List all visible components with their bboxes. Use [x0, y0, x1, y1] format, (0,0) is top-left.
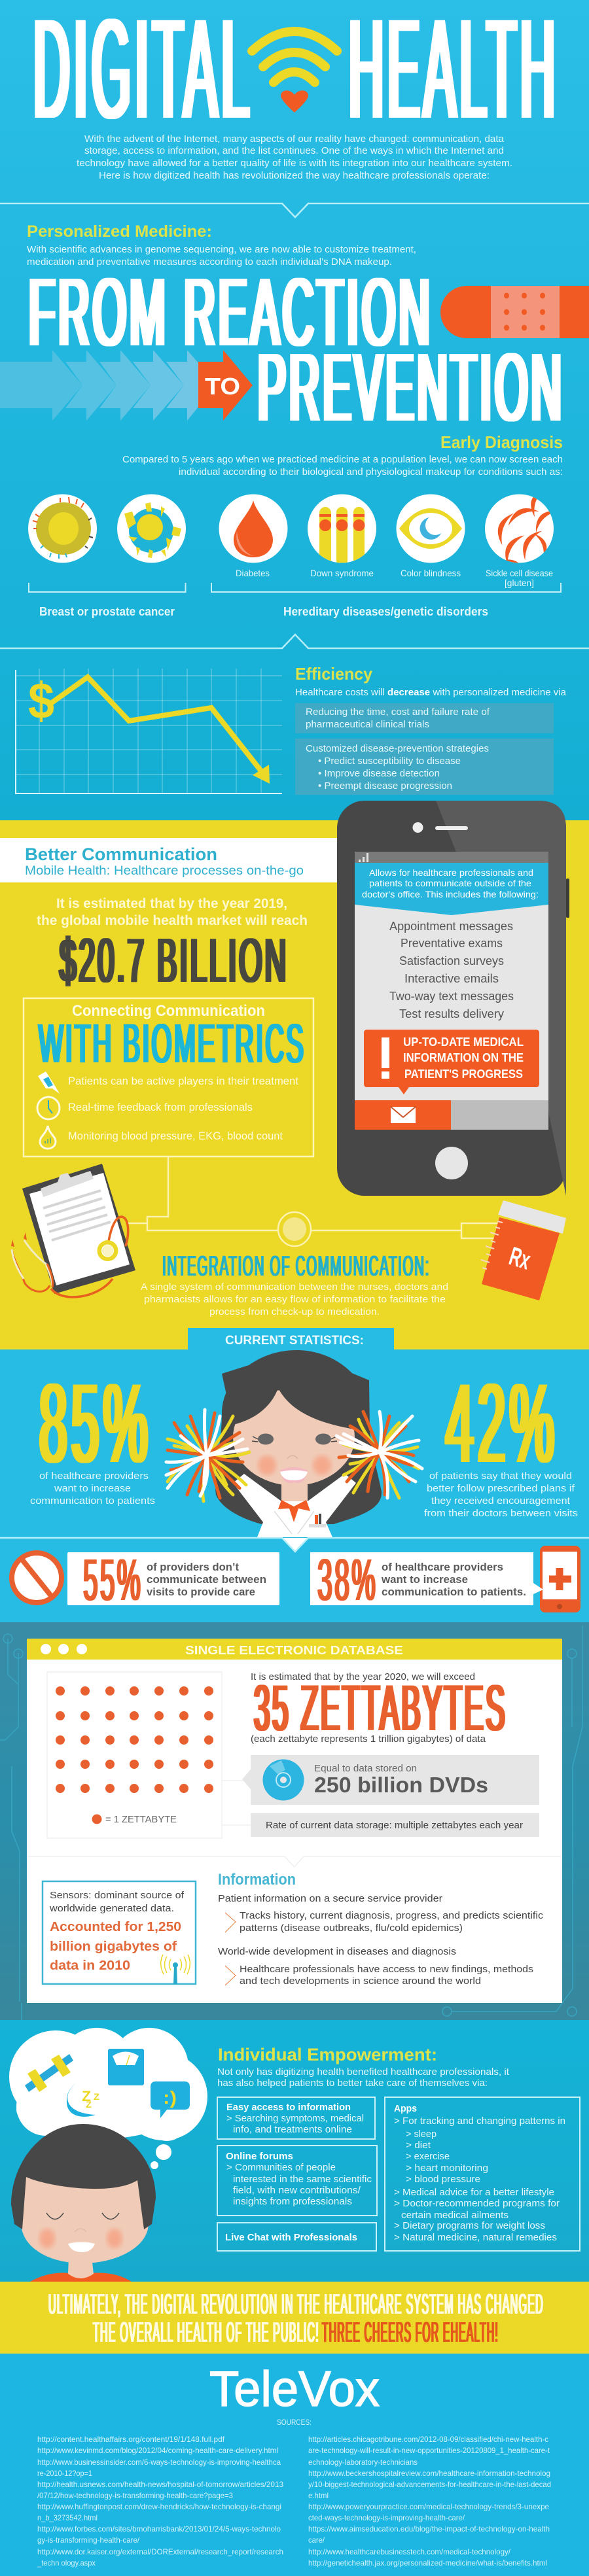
dot matrix: 35 zettabytes: = 1 ZETTABYTE: [105, 1814, 177, 1825]
phone list: Satisfaction surveys: [399, 954, 504, 967]
phone mockup: [337, 801, 569, 1196]
panel: connecting communication with biometrics: Patients can be active players in their treatment: [68, 1075, 298, 1087]
intro paragraph: Here is how digitized health has revolutionized the way healthcare professionals operate:: [99, 170, 490, 181]
heading: sources: SOURCES:: [277, 2418, 312, 2427]
bracket: hereditary: [211, 583, 561, 592]
panel: Better Communication banner: [0, 838, 347, 882]
text: mobile market estimate: [37, 896, 308, 928]
list: sources left: http://health.usnews.com/health-news/hospital-of-tomorrow/articles/2013: [37, 2480, 283, 2489]
panel: 38% stat: want to increase: [381, 1573, 468, 1586]
window buttons: [41, 1644, 87, 1654]
list: sources left: /07/12/how-technology-is-transforming-health-care?page=3: [37, 2491, 233, 2500]
illustration: thought cloud: [9, 2028, 207, 2169]
panel: sensors: [43, 1881, 196, 1984]
panel: rate of data storage: Rate of current data storage: multiple zettabytes each year: [266, 1820, 523, 1831]
logo: TeleVox: TeleVox: [209, 2361, 380, 2417]
heading: Personalized Medicine: Personalized Medicine:: [27, 222, 212, 241]
panel: clinical trials: [295, 703, 554, 733]
phone alert: UP-TO-DATE MEDICAL: [403, 1036, 524, 1049]
text: zettabytes estimate: It is estimated that by the year 2020, we will exceed: [251, 1671, 475, 1682]
text: integration paragraph: pharmacists allows for an easy flow of information to facilitate the: [144, 1294, 446, 1305]
list: sources left: gy-is-transforming-health-care/: [37, 2535, 140, 2545]
panel: clinical trials: Reducing the time, cost and failure rate of: [306, 706, 490, 718]
labels: hereditary conditions: Color blindness: [401, 568, 461, 578]
stat: 85%: communication to patients: [30, 1495, 155, 1506]
panel: prevention strategies: Customized disease-prevention strategies: [306, 743, 489, 754]
icon: dumbbell: [25, 2054, 73, 2092]
list: sources right: are-technology-will-result-in-new-opportunities-20120809_1_health-care-t: [308, 2446, 550, 2455]
label: Breast or prostate cancer: Breast or prostate cancer: [39, 605, 175, 618]
icon: wifi heart: [252, 31, 337, 113]
icon: smiley speech bubble: [151, 2081, 190, 2118]
text: WITH BIOMETRICS: [39, 1013, 306, 1074]
list: sources right: care/: [308, 2535, 325, 2545]
phone alert: [364, 1030, 539, 1094]
text: $20.7 BILLION: [60, 926, 289, 996]
panel: prevention strategies: • Preempt disease progression: [318, 780, 452, 792]
panel: apps: > exercise: [406, 2151, 450, 2162]
panel: apps: > Medical advice for a better lifestyle: [394, 2187, 554, 2198]
panel: online forums: field, with new contributions/: [233, 2185, 361, 2196]
arrow: TO: [198, 350, 253, 421]
panel: apps: > heart monitoring: [406, 2163, 488, 2174]
panel: live chat: Live Chat with Professionals: [225, 2232, 357, 2243]
panel: DVD equivalent: [242, 1755, 539, 1805]
list: sources right: e.html: [308, 2491, 329, 2500]
list: sources left: [37, 2435, 283, 2567]
intro paragraph: storage, access to information, and the list continues. One of the ways in which the Internet and: [84, 145, 504, 156]
background: blue empowerment section: [0, 2020, 589, 2282]
phone alert: INFORMATION ON THE: [403, 1051, 524, 1064]
text: healthcare costs: Healthcare costs will decrease with personalized medicine via: [295, 687, 567, 698]
panel: easy access to information: Easy access to information: [226, 2102, 351, 2113]
panel: sensors: Sensors: dominant source of: [50, 1890, 185, 1901]
panel: 55% stat: [67, 1548, 279, 1613]
panel: 38% stat: [310, 1548, 543, 1613]
list: sources right: http://genetichealth.jax.org/personalized-medicine/what-is/benefits.html: [308, 2558, 547, 2567]
text: early diagnosis paragraph: [122, 454, 563, 478]
text: zettabytes estimate: (each zettabyte represents 1 trillion gigabytes) of data: [251, 1733, 486, 1745]
list: sources left: n_b_3273542.html: [37, 2513, 98, 2522]
icon: breast or prostate cancer cell 2: [117, 495, 186, 563]
panel: DVD equivalent: 250 billion DVDs: [314, 1773, 488, 1797]
list: sources right: [308, 2435, 551, 2567]
text: integration paragraph: [141, 1281, 448, 1317]
phone list: Appointment messages: [389, 920, 513, 933]
panel: connecting communication with biometrics: Monitoring blood pressure, EKG, blood count: [68, 1130, 283, 1142]
list: sources right: http://www.poweryourpractice.com/medical-technology-trends/3-unexpe: [308, 2502, 549, 2511]
panel: Better Communication banner: Better Communication: [25, 844, 217, 864]
labels: hereditary conditions: [gluten]: [505, 578, 534, 588]
text: information: Patient information on a secure service provider: [218, 1893, 442, 1904]
phone list: Preventative exams: [401, 937, 503, 950]
text: personalized medicine paragraph: medication and preventative measures according to each individual’s DNA makeup.: [27, 256, 392, 268]
list: sources right: cted-ways-technology-is-improving-health-care/: [308, 2513, 465, 2522]
text: personalized medicine paragraph: With scientific advances in genome sequencing, we are now able to customize treatment,: [27, 244, 416, 255]
list: sources right: http://articles.chicagotribune.com/2012-08-09/classified/chi-new-health-c: [308, 2435, 548, 2444]
phone message panel: doctor's office. This includes the following:: [362, 889, 539, 899]
panel: sensors: data in 2010: [50, 1958, 130, 1973]
panel: apps: > Natural medicine, natural remedies: [394, 2232, 557, 2243]
panel: online forums: insights from professionals: [233, 2196, 352, 2207]
icon: clock: [37, 1097, 60, 1119]
icon: sickle cell disease: [485, 495, 554, 563]
panel: 38% stat: communication to patients.: [382, 1586, 526, 1598]
panel: Better Communication banner: Mobile Health: Healthcare processes on-the-go: [25, 864, 304, 878]
background: top blue section: [0, 0, 589, 820]
icon: bandage: [440, 286, 589, 338]
intro paragraph: technology have allowed for a better quality of life is with its integration into our healthcare system.: [77, 158, 512, 169]
panel: apps: > Doctor-recommended programs for: [394, 2198, 560, 2209]
panel: clinical trials: pharmaceutical clinical trials: [306, 719, 429, 730]
text: information: patterns (disease outbreaks, flu/cold epidemics): [240, 1923, 463, 1934]
text: empowerment paragraph: has also helped patients to better take care of themselves via:: [217, 2078, 488, 2089]
phone message panel: patients to communicate outside of the: [369, 878, 531, 888]
text: integration paragraph: process from check-up to medication.: [209, 1306, 380, 1317]
stat: 85%: of healthcare providers: [39, 1471, 149, 1482]
panel: apps: > blood pressure: [406, 2174, 480, 2185]
list: sources left: http://www.huffingtonpost.com/drew-hendricks/how-technology-is-changi: [37, 2502, 281, 2511]
panel: apps: certain medical ailments: [401, 2210, 509, 2221]
list: sources right: https://www.aimseducation.edu/blog/the-impact-of-technology-on-health: [308, 2524, 550, 2533]
text: information: and tech developments in science around the world: [240, 1976, 481, 1987]
panel: 55% stat: visits to provide care: [147, 1586, 255, 1598]
background: dark teal database section: [0, 1622, 589, 2020]
text: 85%: [39, 1361, 152, 1486]
panel: rate of data storage: [251, 1813, 539, 1837]
arrows: chevron trail: [0, 350, 198, 421]
illustration: smiling patient: [11, 2124, 156, 2282]
pom-pom left: [166, 1410, 249, 1501]
panel: apps: [385, 2097, 580, 2251]
icon: smiley speech bubble: :): [163, 2087, 177, 2108]
icon: scale: [108, 2049, 144, 2085]
panel: connecting communication with biometrics: Real-time feedback from professionals: [68, 1101, 253, 1113]
labels: hereditary conditions: [236, 568, 553, 588]
stat: 42%: [424, 1361, 578, 1519]
icon: diabetes blood drop: [219, 495, 288, 563]
icon: medical phone: [540, 1546, 580, 1612]
arrow: TO: TO: [205, 373, 240, 400]
panel: sensors: billion gigabytes of: [50, 1940, 177, 1954]
icon: Rx bottle: [481, 1200, 566, 1300]
background: footer blue section: [0, 2354, 589, 2576]
panel: sensors: worldwide generated data.: [49, 1903, 174, 1914]
icon: breast or prostate cancer cell 1: [28, 495, 97, 563]
panel: 38% stat: of healthcare providers: [382, 1561, 503, 1573]
pom-pom right: [336, 1412, 422, 1498]
phone list: Interactive emails: [404, 972, 499, 985]
stat: 85%: [30, 1361, 155, 1506]
phone message panel: Allows for healthcare professionals and: [369, 867, 533, 878]
icon: Rx bottle: Rx: [506, 1242, 534, 1276]
connector lines: [128, 1157, 499, 1246]
panel: connecting communication with biometrics: Connecting Communication: [72, 1002, 265, 1020]
phone list: Two-way text messages: [389, 990, 514, 1003]
panel: apps: > sleep: [406, 2129, 437, 2140]
heading: Efficiency: Efficiency: [295, 664, 373, 684]
text: mobile market estimate: It is estimated that by the year 2019,: [56, 896, 287, 911]
list: sources left: http://www.kevinmd.com/blog/2012/04/coming-health-care-delivery.html: [37, 2446, 278, 2455]
icon: blood drop monitor: [40, 1126, 56, 1149]
list: sources left: http://www.forbes.com/sites/bmoharrisbank/2013/01/24/5-ways-technolo: [37, 2524, 281, 2533]
text: information: Information: [218, 1871, 296, 1888]
stat: 42%: better follow prescribed plans if: [427, 1483, 575, 1494]
panel: prevention strategies: • Improve disease detection: [318, 768, 440, 779]
label: Hereditary diseases: Hereditary diseases/genetic disorders: [283, 605, 488, 618]
panel: easy access to information: > Searching symptoms, medical: [226, 2113, 364, 2124]
text: information: Healthcare professionals have access to new findings, methods: [240, 1964, 533, 1975]
panel: online forums: [217, 2146, 377, 2216]
panel: apps: > diet: [406, 2140, 431, 2151]
panel: 55% stat: 55%: [83, 1548, 143, 1613]
list: sources right: echnology-laboratory-technicians: [308, 2458, 418, 2467]
phone list: [389, 920, 514, 1020]
phone message panel: [355, 863, 548, 915]
list: sources left: http://www.businessinsider.com/6-ways-technology-is-improving-healthca: [37, 2458, 281, 2467]
panel: apps: > Dietary programs for weight loss: [394, 2220, 545, 2231]
dot matrix: 35 zettabytes: [47, 1672, 251, 1838]
background: yellow communication section: [0, 820, 589, 1349]
icon: moon and sleep: Z: [94, 2091, 99, 2102]
icon: down syndrome chromosomes: [308, 495, 376, 566]
text: information: World-wide development in diseases and diagnosis: [218, 1946, 456, 1957]
panel: 55% stat: communicate between: [147, 1573, 266, 1586]
intro paragraph: [77, 133, 512, 181]
labels: hereditary conditions: Diabetes: [236, 568, 270, 578]
panel: single electronic database window: [27, 1639, 562, 2003]
text: early diagnosis paragraph: individual according to their biological and physiological makeup for conditions such as:: [179, 466, 563, 478]
list: sources left: re-2010-12?op=1: [37, 2469, 92, 2478]
background: blue statistics section: [0, 1349, 589, 1622]
stat: 42%: from their doctors between visits: [424, 1508, 578, 1519]
panel: 38% stat: 38%: [317, 1548, 378, 1613]
banner: conclusion: [0, 2282, 589, 2354]
panel: sensors: Accounted for 1,250: [50, 1920, 181, 1934]
phone list: Test results delivery: [399, 1007, 504, 1020]
panel: apps: > For tracking and changing patterns in: [394, 2115, 565, 2127]
panel: online forums: Online forums: [226, 2151, 293, 2162]
list: sources right: http://www.healthcarebusinesstech.com/medical-technology/: [308, 2547, 511, 2556]
panel: single electronic database window: SINGLE ELECTRONIC DATABASE: [185, 1644, 403, 1657]
icon: color blindness eye: [397, 495, 465, 563]
icon: moon and sleep: Z: [86, 2099, 92, 2110]
bracket: cancer: [29, 583, 186, 592]
tab: Current Statistics: [188, 1328, 394, 1350]
chart: healthcare cost decline: [16, 669, 282, 793]
text: integration paragraph: A single system of communication between the nurses, doctors and: [141, 1281, 448, 1293]
icon: moon and sleep: Z: [82, 2088, 91, 2104]
panel: live chat: [217, 2223, 376, 2251]
stat: 42%: they received encouragement: [431, 1495, 571, 1506]
list: sources right: y/10-biggest-technological-advancements-for-healthcare-in-the-last-decad: [308, 2480, 551, 2489]
labels: hereditary conditions: Sickle cell disease: [486, 568, 553, 578]
panel: easy access to information: info, and treatments online: [233, 2124, 352, 2135]
chart: healthcare cost decline: $: [28, 672, 54, 729]
text: empowerment paragraph: Not only has digitizing health benefited healthcare professionals, it: [217, 2066, 510, 2078]
list: sources left: _techn ology.aspx: [37, 2558, 96, 2567]
heading: Early Diagnosis: Early Diagnosis: [440, 432, 563, 452]
panel: online forums: > Communities of people: [226, 2162, 336, 2173]
text: personalized medicine paragraph: [27, 244, 416, 268]
panel: prevention strategies: • Predict susceptibility to disease: [318, 756, 461, 767]
icon: clipboard and stethoscope: [11, 1164, 135, 1297]
icon: moon and sleep: [67, 2082, 99, 2117]
panel: DVD equivalent: Equal to data stored on: [314, 1763, 417, 1774]
list: sources left: http://www.dor.kaiser.org/external/DORExternal/research_report/research: [37, 2547, 283, 2556]
labels: hereditary conditions: Down syndrome: [310, 568, 374, 578]
text: mobile market estimate: the global mobile health market will reach: [37, 913, 308, 928]
list: sources left: http://content.healthaffairs.org/content/19/1/148.full.pdf: [37, 2435, 225, 2444]
phone bottom tabs: [355, 1100, 548, 1130]
intro paragraph: With the advent of the Internet, many aspects of our reality have changed: communication, data: [84, 133, 505, 145]
text: early diagnosis paragraph: Compared to 5 years ago when we practiced medicine at a population level, we can now screen each: [122, 454, 563, 465]
panel: apps: Apps: [394, 2103, 417, 2114]
panel: 55% stat: of providers don’t: [147, 1561, 239, 1573]
panel: prevention strategies: [295, 739, 554, 795]
tab: Current Statistics: CURRENT STATISTICS:: [225, 1334, 364, 1348]
text: information: Tracks history, current diagnosis, progress, and predicts scientific: [240, 1910, 544, 1921]
stat: 42%: of patients say that they would: [429, 1471, 572, 1482]
list: sources right: http://www.beckershospitalreview.com/healthcare-information-technolog: [308, 2469, 550, 2478]
text: empowerment paragraph: [217, 2066, 510, 2089]
stat: 85%: want to increase: [54, 1483, 131, 1494]
phone alert: PATIENT'S PROGRESS: [404, 1068, 523, 1081]
illustration: cheering doctor: [166, 1350, 422, 1552]
icon: prohibition sign: [12, 1553, 62, 1603]
panel: online forums: interested in the same scientific: [233, 2174, 372, 2185]
panel: easy access to information: [217, 2097, 375, 2139]
icon: antenna: [161, 1955, 190, 1984]
text: information: [218, 1871, 544, 1987]
icon: syringe: [38, 1071, 60, 1094]
panel: connecting communication with biometrics: [24, 998, 313, 1157]
heading: Individual Empowerment: Individual Empowerment:: [218, 2045, 437, 2064]
